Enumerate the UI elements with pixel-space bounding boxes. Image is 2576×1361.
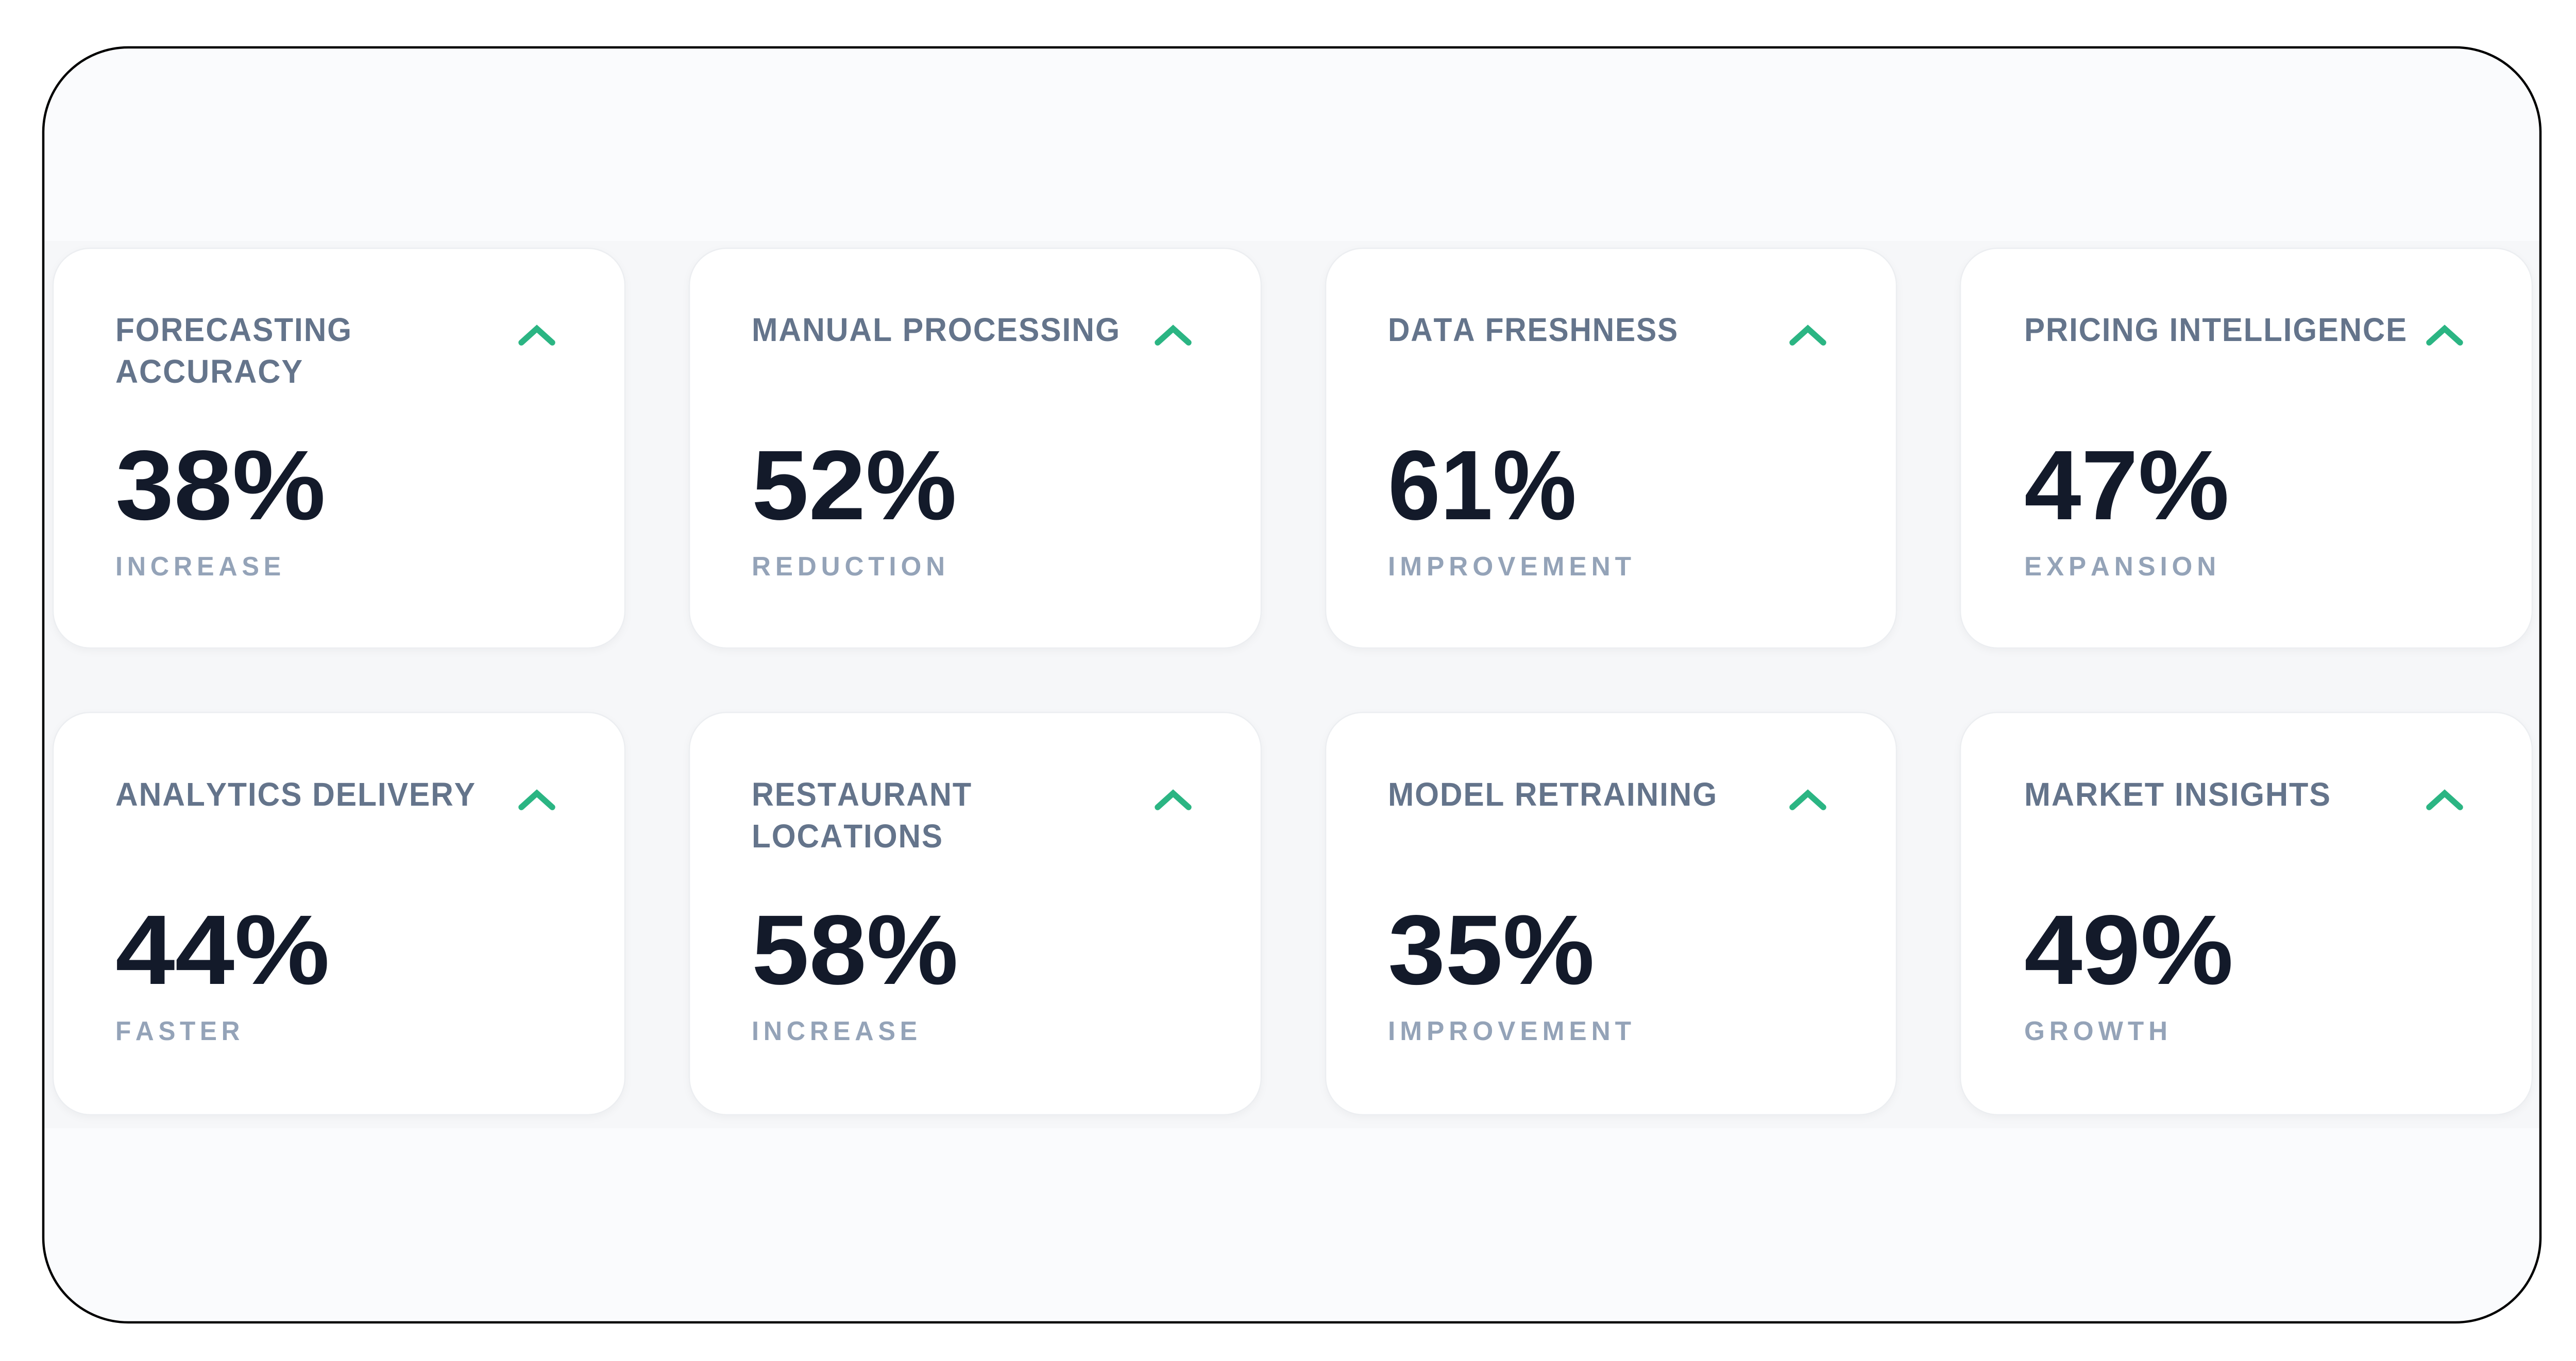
icon: up chevron xyxy=(2429,329,2460,343)
panel: analytics delivery xyxy=(53,712,625,1115)
value: 61% xyxy=(1388,430,1577,540)
panel: model retraining xyxy=(1326,712,1896,1115)
caption: INCREASE xyxy=(752,1016,922,1046)
icon: up chevron xyxy=(2429,793,2460,807)
value: 44% xyxy=(115,894,330,1005)
caption: IMPROVEMENT xyxy=(1388,1016,1636,1046)
panel: restaurant locations xyxy=(689,712,1261,1115)
value: 35% xyxy=(1388,894,1595,1005)
label: MARKET INSIGHTS xyxy=(2024,776,2331,813)
caption: REDUCTION xyxy=(752,552,950,582)
icon: up chevron xyxy=(1792,329,1823,343)
icon: up chevron xyxy=(521,793,552,807)
icon: up chevron xyxy=(1792,793,1823,807)
grey band behind the cards xyxy=(43,241,2540,1128)
caption: FASTER xyxy=(115,1016,244,1046)
label: ANALYTICS DELIVERY xyxy=(115,776,476,813)
panel: manual processing xyxy=(689,248,1261,648)
label: FORECASTING xyxy=(115,311,352,348)
label line 2: ACCURACY xyxy=(115,353,303,390)
caption: INCREASE xyxy=(115,552,285,582)
panel: data freshness xyxy=(1326,248,1896,648)
label: MANUAL PROCESSING xyxy=(752,311,1121,348)
value: 47% xyxy=(2024,430,2229,540)
value: 49% xyxy=(2024,894,2233,1005)
panel: forecasting accuracy xyxy=(53,248,625,648)
icon: up chevron xyxy=(1158,329,1189,343)
label: DATA FRESHNESS xyxy=(1388,311,1679,348)
caption: IMPROVEMENT xyxy=(1388,552,1636,582)
label: RESTAURANT xyxy=(752,776,972,813)
label line 2: LOCATIONS xyxy=(752,818,943,855)
caption: GROWTH xyxy=(2024,1016,2172,1046)
label: MODEL RETRAINING xyxy=(1388,776,1718,813)
label: PRICING INTELLIGENCE xyxy=(2024,311,2408,348)
panel: market insights xyxy=(1960,712,2532,1115)
icon: up chevron xyxy=(1158,793,1189,807)
icon: up chevron xyxy=(521,329,552,343)
value: 58% xyxy=(752,894,958,1005)
panel: pricing intelligence xyxy=(1960,248,2532,648)
caption: EXPANSION xyxy=(2024,552,2221,582)
value: 52% xyxy=(752,430,957,540)
value: 38% xyxy=(115,430,326,540)
